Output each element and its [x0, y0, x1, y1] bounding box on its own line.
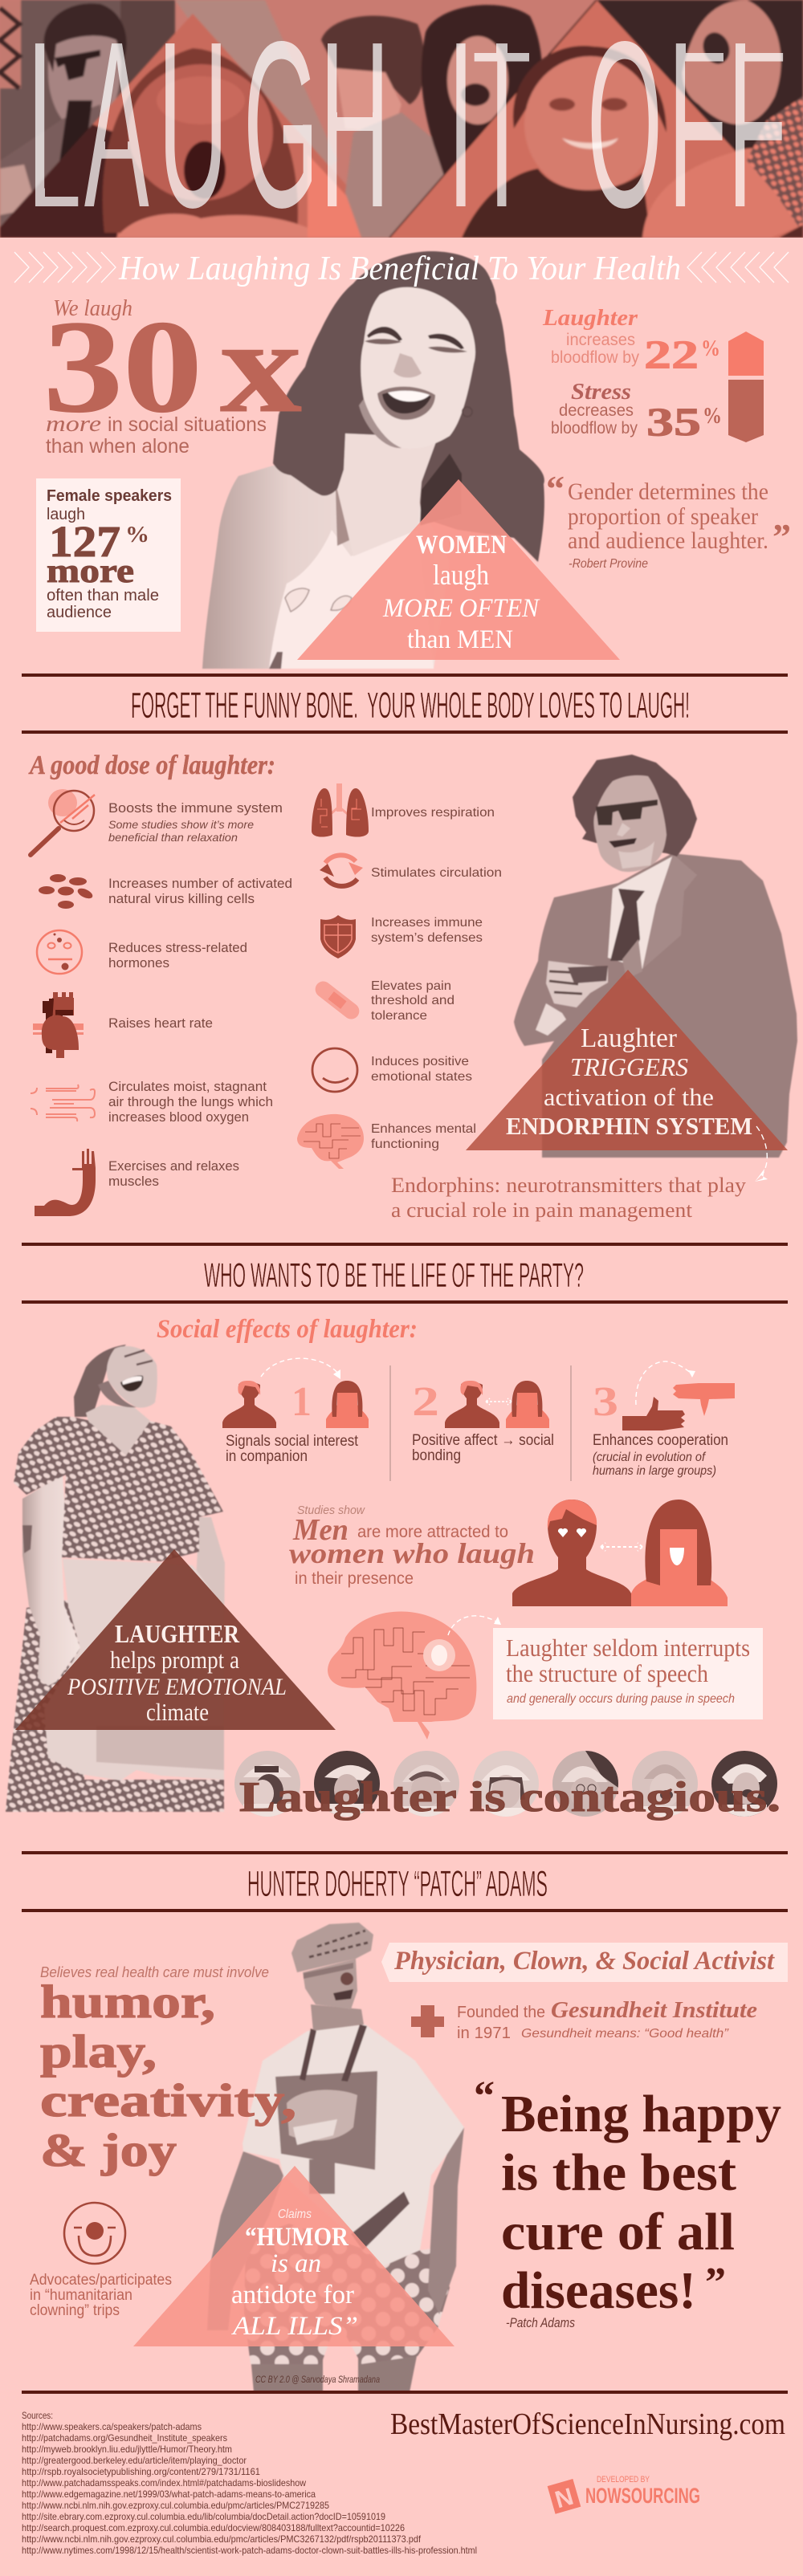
list heading: a good dose of laughter: A good dose of laughter:: [28, 751, 275, 780]
stat: 30x more in social situations: [43, 293, 302, 458]
stat: bloodflow: %: [703, 404, 722, 429]
icon: shield: [320, 915, 356, 958]
triangle: laughter helps prompt positive emotional climate: POSITIVE EMOTIONAL: [67, 1674, 287, 1700]
sources list: [22, 2410, 477, 2556]
benefits list: left column text: Reduces stress-related: [108, 941, 247, 955]
photo credit: CC BY 2.0 @ Sarvodaya Shramadana: [255, 2375, 380, 2385]
social effect 2: bonding: 2: [412, 1379, 439, 1425]
callout: female speakers: often than male: [47, 587, 159, 604]
triangle: humor is an antidote: ALL ILLS”: [231, 2312, 358, 2341]
text: humor play creativity joy: & joy: [40, 2124, 177, 2176]
quote: being happy is the best cure: cure of all: [501, 2203, 735, 2261]
divider rule: [22, 1300, 788, 1304]
subtitle: How Laughing Is Beneficial To Your Health: [118, 250, 681, 287]
benefits list: right column text: tolerance: [371, 1009, 427, 1023]
icon: thumbs down: [673, 1383, 735, 1416]
text: men attracted to women who laugh: women who laugh: [289, 1537, 535, 1569]
stat: 30x more in social situations: 30: [43, 293, 202, 440]
photo: Patch Adams: [207, 1923, 464, 2392]
triangle: laughter helps prompt positive emotional climate: climate: [146, 1698, 209, 1726]
sources list: http://myweb.brooklyn.liu.edu/jlyttle/Humor/Theory.htm: [22, 2444, 232, 2455]
quote: Robert Provine: ”: [772, 516, 791, 557]
quote: Robert Provine: Gender determines the: [568, 478, 768, 505]
text: humor play creativity joy: play,: [40, 2025, 157, 2077]
sources list: http://www.edgemagazine.net/1999/03/what-patch-adams-means-to-america: [22, 2489, 316, 2500]
caption: laughter is contagious: Laughter is contagious.: [239, 1774, 781, 1821]
icon: stress hormones face: [37, 930, 82, 974]
icon: virus killing cells: [39, 874, 94, 909]
benefits list: left column text: Increases number of activated: [108, 877, 292, 891]
icon: lungs: [312, 783, 369, 837]
divider rule: [22, 730, 788, 734]
triangle text: WOMEN: [416, 531, 507, 560]
benefits list: left column text: increases blood oxygen: [108, 1110, 249, 1125]
icon: couple with heart eyes: [512, 1500, 728, 1606]
logo: NowSourcing: DEVELOPED BY: [597, 2475, 650, 2484]
text: men attracted to women who laugh: Studies show: [297, 1504, 365, 1517]
banner: collage of laughing faces with title: [0, 0, 803, 257]
text: men attracted to women who laugh: are more attracted to: [357, 1523, 508, 1541]
icon: circulating air: [31, 1085, 95, 1121]
sources list: http://www.nytimes.com/1998/12/15/health/scientist-work-patch-adams-doctor-clown-suit-battles-ills-his-profession.html: [22, 2545, 477, 2556]
photo: laughing woman: [202, 251, 544, 669]
benefits list: left column text: Exercises and relaxes: [108, 1159, 239, 1174]
icon: heart: [33, 992, 84, 1058]
triangle: humor is an antidote: Claims: [278, 2208, 312, 2221]
benefits list: left column text: Circulates moist, stagnant: [108, 1080, 267, 1094]
triangle: women laugh more often: [297, 479, 620, 660]
sources list: http://www.ncbi.nlm.nih.gov.ezproxy.cul.columbia.edu/pmc/articles/PMC2719285: [22, 2500, 329, 2511]
sources list: http://www.patchadamsspeaks.com/index.html#/patchadams-bioslideshow: [22, 2477, 306, 2489]
text: Gesundheit Institute: in 1971: [457, 2025, 511, 2042]
callout: female speakers: [36, 478, 181, 632]
triangle: laughter triggers endorphin system: activation of the: [544, 1083, 714, 1111]
icon: bandage: [312, 978, 362, 1023]
benefits list: left column text: [108, 801, 292, 1189]
icon: brain with highlight: [328, 1611, 476, 1740]
callout: laughter seldom interrupts speech: the structure of speech: [506, 1659, 708, 1687]
social effect 3: cooperation: [593, 1361, 735, 1478]
stat: bloodflow: [542, 305, 764, 444]
benefits list: left column text: hormones: [108, 956, 169, 971]
benefits list: right column text: functioning: [371, 1137, 439, 1151]
stat: 30x more in social situations: We laugh: [53, 295, 132, 321]
benefits list: left column text: beneficial than relaxation: [108, 831, 238, 844]
social effect 1: signals interest: Signals social interest: [226, 1433, 359, 1450]
social effect 3: cooperation: 3: [593, 1379, 618, 1425]
text: humor play creativity joy: Believes real health care must involve: [40, 1964, 269, 1980]
triangle: laughter helps prompt positive emotional climate: LAUGHTER: [115, 1619, 240, 1648]
icon: flexing arm: [35, 1149, 96, 1216]
triangle: humor is an antidote: antidote for: [231, 2281, 354, 2309]
triangle: humor is an antidote: “HUMOR: [245, 2223, 349, 2252]
stat: bloodflow: Laughter: [542, 305, 638, 331]
text: humanitarian clowning: Advocates/participates: [30, 2272, 172, 2289]
benefits list: left column text: muscles: [108, 1174, 159, 1189]
social effect 1: signals interest: 1: [291, 1379, 312, 1425]
triangle: laughter helps prompt positive emotional climate: helps prompt a: [110, 1646, 239, 1674]
quote: being happy is the best cure: is the best: [501, 2143, 736, 2202]
benefits list: right column text: [371, 806, 502, 1151]
text: men attracted to women who laugh: Men: [292, 1513, 349, 1547]
stat: bloodflow: 35: [646, 399, 701, 444]
triangle text: than MEN: [407, 625, 513, 654]
quote: being happy is the best cure: diseases!: [501, 2261, 696, 2320]
photo: man with glasses and drink: [514, 755, 797, 1158]
icon: smile: [312, 1048, 357, 1092]
benefits list: right column text: emotional states: [371, 1070, 472, 1084]
callout: female speakers: %: [125, 523, 149, 547]
note: endorphins definition: [391, 1174, 746, 1222]
triangle text: laugh: [433, 559, 489, 591]
callout: female speakers: Female speakers: [47, 487, 172, 505]
text: humanitarian clowning: clowning” trips: [30, 2302, 120, 2319]
benefits list: left column text: Some studies show it’s more: [108, 818, 254, 831]
icon: circulation arrows: [320, 855, 363, 886]
social effect 3: cooperation: Enhances cooperation: [593, 1432, 728, 1449]
icon: thumbs up: [622, 1397, 685, 1430]
benefits list: left column text: air through the lungs which: [108, 1095, 273, 1109]
divider rule: [22, 1851, 788, 1854]
sources list: http://site.ebrary.com.ezproxy.cul.columbia.edu/lib/columbia/docDetail.action?docID=10591019: [22, 2511, 385, 2522]
social effect 3: cooperation: (crucial in evolution of: [593, 1451, 706, 1464]
text: Gesundheit Institute: [457, 1997, 757, 2042]
quote: being happy is the best cure: -Patch Adams: [506, 2315, 575, 2330]
text: Gesundheit Institute: Gesundheit Institute: [551, 1997, 757, 2023]
logo: NowSourcing: NOWSOURCING: [585, 2484, 700, 2508]
icon: medical cross: [411, 2005, 444, 2037]
icon: clown nose smile: [64, 2203, 125, 2264]
callout: laughter seldom interrupts speech: and generally occurs during pause in speech: [507, 1692, 735, 1706]
benefits list: right column text: Elevates pain: [371, 979, 451, 993]
quote: Robert Provine: [546, 468, 791, 571]
quote: being happy is the best cure: “: [474, 2073, 495, 2119]
triangle text: [382, 531, 540, 654]
stat: bloodflow: bloodflow by: [551, 348, 639, 367]
photo: laughing woman in apron: [6, 1345, 225, 1812]
row of laughing portraits: [234, 1751, 777, 1824]
text: men attracted to women who laugh: in their presence: [295, 1569, 414, 1588]
text: humor play creativity joy: creativity,: [40, 2074, 296, 2126]
logo: NowSourcing: N: [552, 2484, 577, 2513]
arrow: brain to speech note: [448, 1616, 501, 1635]
quote: being happy is the best cure: [474, 2073, 781, 2330]
stat: bloodflow: Stress: [571, 379, 631, 405]
text: Gesundheit Institute: Gesundheit means: “Good health”: [521, 2027, 729, 2041]
banner: physician clown activist: Physician, Clown, & Social Activist: [393, 1947, 775, 1976]
benefits list: left column text: Boosts the immune system: [108, 801, 283, 816]
triangle: laughter triggers endorphin system: TRIGGERS: [570, 1052, 688, 1081]
benefits list: right column text: Stimulates circulation: [371, 866, 502, 880]
stat: bloodflow: 22: [644, 332, 699, 376]
note: endorphins definition: Endorphins: neurotransmitters that play: [391, 1174, 746, 1197]
quote: Robert Provine: “: [546, 468, 565, 509]
triangle: humor is an antidote: [133, 2166, 454, 2346]
stat: 30x more in social situations: in social situations: [108, 413, 267, 436]
triangle: laughter triggers endorphin system: ENDORPHIN SYSTEM: [506, 1112, 752, 1140]
callout: female speakers: laugh: [47, 506, 85, 523]
social effect 1: signals interest: [222, 1358, 369, 1465]
note: endorphins definition: a crucial role in pain management: [391, 1198, 693, 1222]
triangle: laughter triggers endorphin system: Laughter: [581, 1023, 678, 1053]
logo: NowSourcing: [548, 2475, 700, 2514]
stat: bloodflow: decreases: [559, 401, 634, 420]
benefits list: right column text: Enhances mental: [371, 1122, 476, 1136]
stat: 30x more in social situations: x: [220, 293, 302, 440]
triangle text: MORE OFTEN: [382, 594, 540, 623]
text: humanitarian clowning: in “humanitarian: [30, 2287, 132, 2304]
icon: brain: [297, 1114, 364, 1169]
icon: magnifying glass: [31, 789, 95, 855]
arrow: thumb exchange: [636, 1361, 692, 1405]
benefits list: right column text: Increases immune: [371, 916, 483, 930]
callout: laughter seldom interrupts speech: Laughter seldom interrupts: [506, 1634, 750, 1662]
quote: being happy is the best cure: ”: [705, 2260, 726, 2305]
stat: bloodflow: %: [701, 336, 720, 361]
sources list: http://greatergood.berkeley.edu/article/item/playing_doctor: [22, 2455, 247, 2466]
quote: Robert Provine: -Robert Provine: [569, 557, 648, 571]
text: men attracted to women who laugh: [289, 1504, 535, 1588]
callout: female speakers: audience: [47, 604, 112, 621]
sources list: Sources:: [22, 2410, 53, 2421]
social effect 1: signals interest: in companion: [226, 1448, 308, 1465]
triangle: laughter helps prompt positive emotional climate: [15, 1549, 336, 1730]
divider rule: [22, 1909, 788, 1912]
social effect 2: bonding: [412, 1379, 554, 1464]
divider rule: [22, 2391, 788, 2394]
triangle: laughter triggers endorphin system: [466, 970, 788, 1150]
social effect 2: bonding: Positive affect → social: [412, 1432, 554, 1449]
sources list: http://patchadams.org/Gesundheit_Institute_speakers: [22, 2432, 227, 2444]
chevrons beside subtitle: [14, 252, 789, 283]
triangle: humor is an antidote: is an: [271, 2249, 321, 2278]
benefits list: right column text: threshold and: [371, 994, 454, 1007]
social effects heading: Social effects of laughter:: [157, 1315, 418, 1344]
column dividers: [390, 1365, 571, 1481]
social effect 3: cooperation: humans in large groups): [593, 1464, 716, 1478]
text: humor play creativity joy: [40, 1964, 296, 2176]
arrow: endorphin definition: [755, 1126, 768, 1182]
sources list: http://www.ncbi.nlm.nih.gov.ezproxy.cul.columbia.edu/pmc/articles/PMC3267132/pdf/rspb20111373.pdf: [22, 2533, 422, 2545]
quote: Robert Provine: proportion of speaker: [568, 503, 758, 530]
benefits list: right column text: system’s defenses: [371, 931, 483, 945]
divider rule: [22, 1243, 788, 1246]
stat: bloodflow: bloodflow by: [551, 419, 638, 437]
text: humor play creativity joy: humor,: [40, 1976, 215, 2028]
benefits list: left column text: natural virus killing cells: [108, 892, 255, 906]
sources list: http://rspb.royalsocietypublishing.org/content/279/1731/1161: [22, 2466, 260, 2477]
callout: female speakers: 127: [49, 517, 120, 566]
text: humanitarian clowning: [30, 2272, 172, 2319]
stat: 30x more in social situations: than when alone: [46, 435, 190, 458]
text: Gesundheit Institute: Founded the: [457, 2004, 545, 2021]
sources list: http://search.proquest.com.ezproxy.cul.columbia.edu/docview/808403188/fulltext?accountid=10226: [22, 2522, 405, 2533]
benefits list: right column text: Induces positive: [371, 1055, 469, 1068]
quote: Robert Provine: and audience laughter.: [568, 527, 768, 554]
callout: female speakers: more: [47, 553, 134, 590]
callout: laughter seldom interrupts speech: [493, 1628, 763, 1719]
banner: physician clown activist: [381, 1943, 788, 1982]
divider rule: [22, 674, 788, 677]
benefits list: right column text: Improves respiration: [371, 806, 495, 820]
social effect 2: bonding: bonding: [412, 1447, 461, 1464]
stat: 30x more in social situations: more: [46, 411, 101, 437]
benefits list: left column text: Raises heart rate: [108, 1016, 213, 1031]
quote: being happy is the best cure: Being happy: [501, 2085, 781, 2143]
icon: bloodflow gauge: [728, 332, 764, 442]
sources list: http://www.speakers.ca/speakers/patch-adams: [22, 2421, 202, 2432]
stat: bloodflow: increases: [566, 331, 635, 349]
